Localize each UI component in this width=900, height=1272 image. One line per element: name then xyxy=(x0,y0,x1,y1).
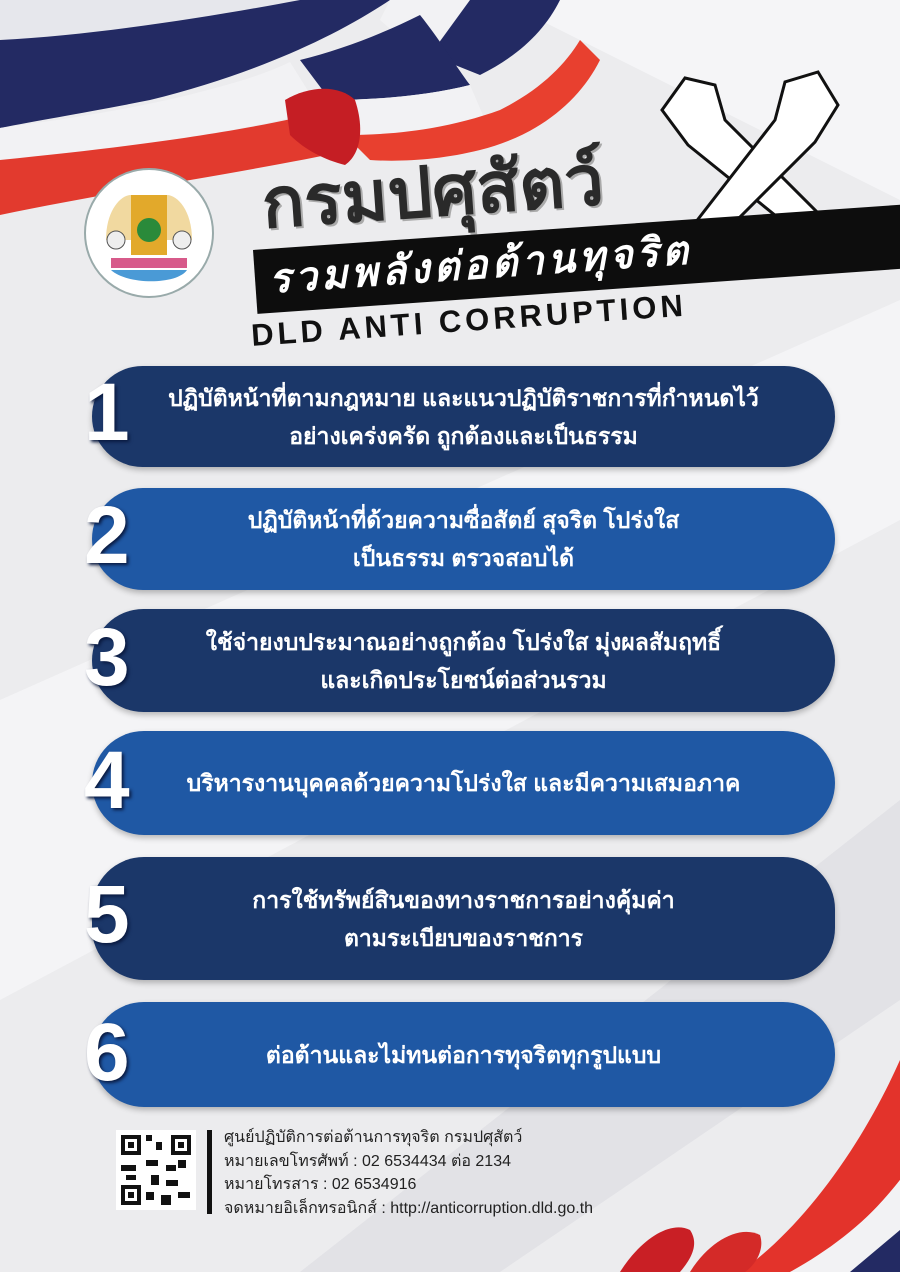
title: กรมปศุสัตว์ xyxy=(259,141,606,243)
item 6 xyxy=(92,1002,835,1107)
contact info xyxy=(224,1128,593,1216)
QR code xyxy=(116,1130,196,1210)
logo: department seal xyxy=(84,168,214,298)
subtitle english: DLD ANTI CORRUPTION xyxy=(250,288,688,353)
item 1: อย่างเคร่งครัด ถูกต้องและเป็นธรรม xyxy=(289,422,638,448)
flag: top left xyxy=(0,0,600,215)
icon: crossed arms xyxy=(660,70,840,219)
contact info: หมายเลขโทรศัพท์ : 02 6534434 ต่อ 2134 xyxy=(224,1152,511,1170)
item 3: ใช้จ่ายงบประมาณอย่างถูกต้อง โปร่งใส มุ่งผลสัมฤทธิ์ xyxy=(206,628,721,654)
item 3 xyxy=(92,609,835,712)
contact info: ศูนย์ปฏิบัติการต่อต้านการทุจริต กรมปศุสัตว์ xyxy=(224,1129,522,1146)
number 2: 2 xyxy=(84,490,130,581)
number 6: 6 xyxy=(84,1007,130,1098)
flag: bottom right xyxy=(620,1060,900,1272)
item 2 xyxy=(92,488,835,590)
item 2: เป็นธรรม ตรวจสอบได้ xyxy=(353,545,574,571)
item 5: การใช้ทรัพย์สินของทางราชการอย่างคุ้มค่า xyxy=(252,886,675,912)
item 1: ปฏิบัติหน้าที่ตามกฎหมาย และแนวปฏิบัติราชการที่กำหนดไว้ xyxy=(168,384,759,410)
item 5 xyxy=(92,857,835,980)
contact info: หมายโทรสาร : 02 6534916 xyxy=(224,1176,416,1193)
number 5: 5 xyxy=(84,869,130,960)
item 2: ปฏิบัติหน้าที่ด้วยความซื่อสัตย์ สุจริต โปร่งใส xyxy=(248,507,679,533)
item 4 xyxy=(92,731,835,835)
number 3: 3 xyxy=(84,612,130,703)
divider bar xyxy=(207,1130,212,1214)
number 4: 4 xyxy=(84,735,130,826)
number 1: 1 xyxy=(84,367,130,458)
item 1 xyxy=(92,366,835,467)
item 4: บริหารงานบุคคลด้วยความโปร่งใส และมีความเสมอภาค xyxy=(187,770,740,796)
contact info: จดหมายอิเล็กทรอนิกส์ : http://anticorruption.dld.go.th xyxy=(224,1200,593,1216)
item 3: และเกิดประโยชน์ต่อส่วนรวม xyxy=(320,666,607,692)
item 5: ตามระเบียบของราชการ xyxy=(344,924,583,950)
subtitle banner: รวมพลังต่อต้านทุจริต xyxy=(268,228,693,302)
subtitle banner xyxy=(253,204,900,314)
item 6: ต่อต้านและไม่ทนต่อการทุจริตทุกรูปแบบ xyxy=(266,1042,661,1068)
